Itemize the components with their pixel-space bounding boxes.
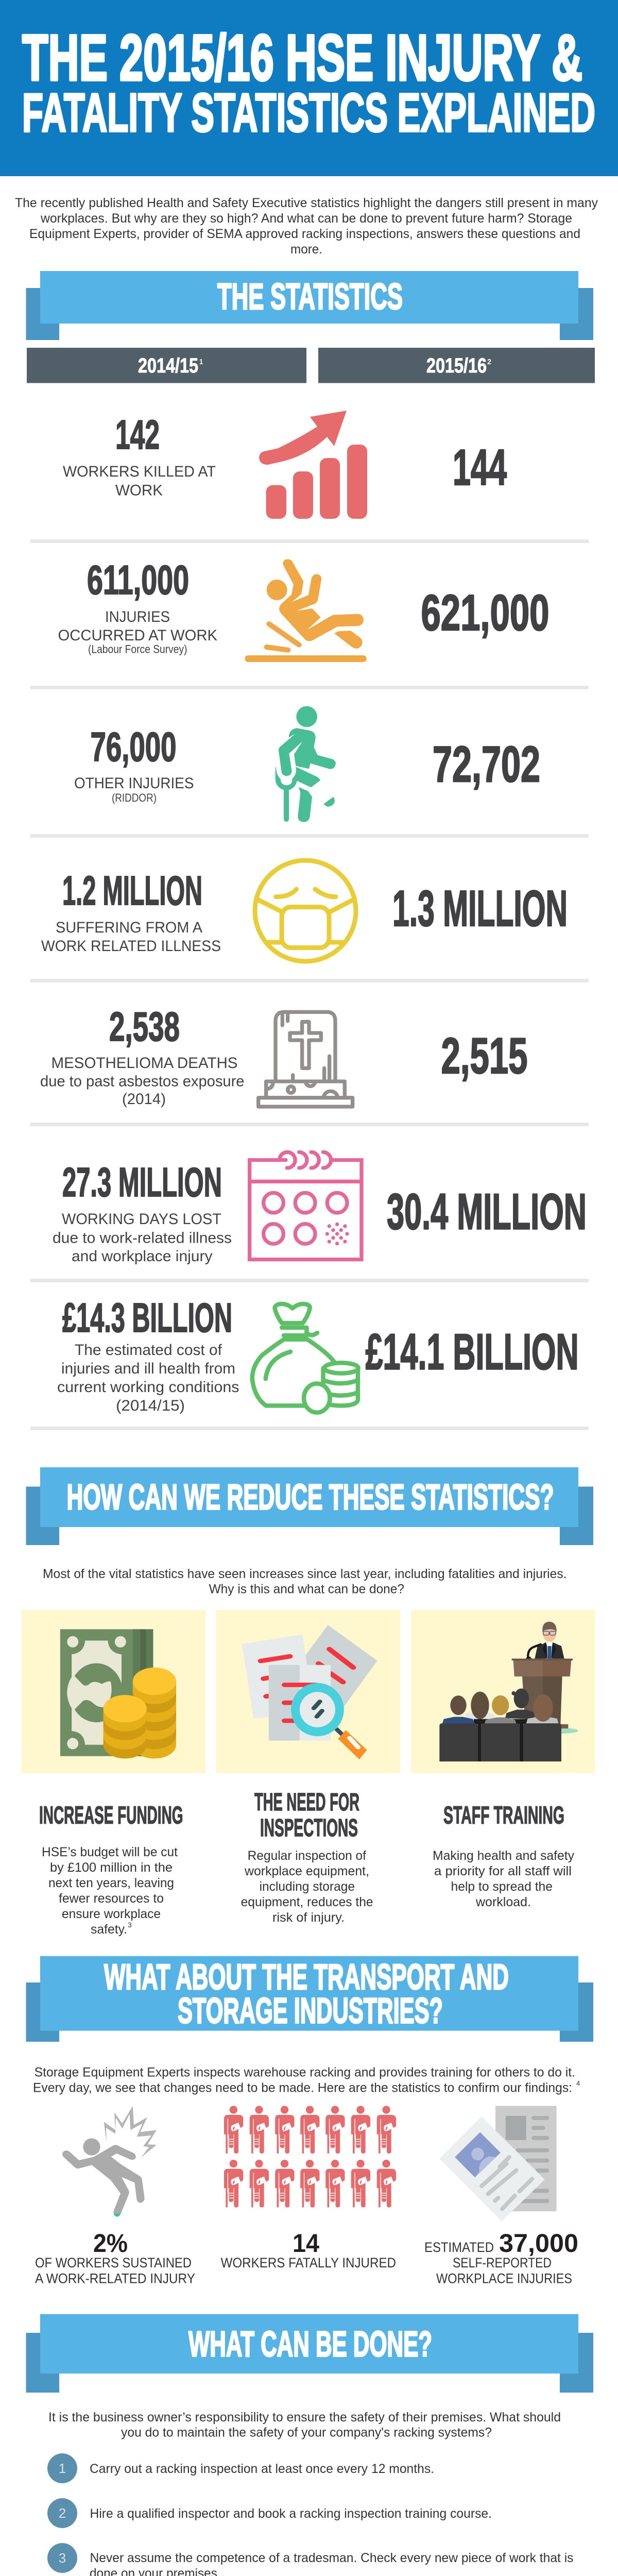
stat row: other injuries xyxy=(74,706,540,822)
step 3: 3 xyxy=(59,2550,66,2566)
label: injuries occurred at work: (Labour Force Survey) xyxy=(88,643,187,656)
icon: banknotes and coins xyxy=(60,1629,176,1758)
figure: estimated 37,000: ESTIMATED xyxy=(424,2240,494,2255)
text: making health and safety a priority: help to spread the xyxy=(451,1879,553,1894)
text: regular inspection: workplace equipment, xyxy=(244,1864,369,1878)
label: suffering from a work related illness: WORK RELATED ILLNESS xyxy=(41,938,221,955)
intro text: storage equipment experts: Every day, we see that changes need to be made. Here are the statistics to confirm our findings: xyxy=(33,2080,572,2095)
intro text: storage equipment experts xyxy=(33,2065,580,2095)
intro text: storage equipment experts: 4 xyxy=(576,2079,580,2087)
stat row: workers killed: 144 xyxy=(453,439,507,496)
stat row: other injuries: 76,000 xyxy=(91,724,176,770)
text: making health and safety a priority: workload. xyxy=(475,1895,531,1909)
heading: increase funding: INCREASE FUNDING xyxy=(39,1802,183,1829)
ribbon heading: transport and storage xyxy=(26,1956,593,2042)
year column header 2014/15 xyxy=(27,348,306,383)
year column header 2015/16 xyxy=(318,348,595,383)
stat: 14 workers fatally injured xyxy=(221,2106,396,2270)
stat row: estimated cost xyxy=(57,1295,579,1414)
year column header 2014/15: 2014/15 xyxy=(138,354,198,377)
text: making health and safety a priority: Making health and safety xyxy=(433,1849,574,1863)
text: HSE budget: HSE’s budget will be cut xyxy=(42,1845,178,1859)
label: suffering from a work related illness xyxy=(41,919,221,955)
stat row: mesothelioma deaths xyxy=(40,1004,527,1108)
intro text: business owner's responsibility: you do to maintain the safety of your company's racking systems? xyxy=(121,2425,492,2439)
icon: grid of 14 injured people xyxy=(224,2106,396,2208)
stat row: workers killed xyxy=(63,411,507,519)
icon: person slipping xyxy=(245,559,367,662)
label: working days lost: and workplace injury xyxy=(72,1248,212,1265)
label: other injuries: (RIDDOR) xyxy=(112,791,157,804)
label: working days lost xyxy=(53,1211,232,1265)
figure: estimated 37,000 xyxy=(424,2229,578,2258)
step 2: 2 xyxy=(59,2505,66,2521)
text: HSE budget: 3 xyxy=(128,1921,132,1929)
text: regular inspection xyxy=(241,1849,373,1925)
title xyxy=(22,22,595,143)
panel: the need for inspections xyxy=(216,1610,400,1925)
stat row: working days lost: 27.3 MILLION xyxy=(62,1159,222,1205)
stat row: other injuries: 72,702 xyxy=(433,736,540,792)
label: working days lost: due to work-related illness xyxy=(53,1229,232,1247)
text: regular inspection: risk of injury. xyxy=(272,1910,345,1925)
label: estimated cost of injuries xyxy=(57,1342,239,1414)
label: other injuries xyxy=(74,775,194,804)
intro text: workplaces. But why are they so high? And what can be done to prevent future harm? Storage xyxy=(40,211,572,226)
stat row: mesothelioma deaths: 2,538 xyxy=(109,1004,180,1049)
intro text: business owner's responsibility: It is the business owner’s responsibility to ensure the safety of their premises. What should xyxy=(48,2410,561,2425)
intro text xyxy=(15,196,598,257)
label: estimated cost of injuries: (2014/15) xyxy=(116,1397,185,1414)
label: workers killed at work: WORK xyxy=(115,482,163,499)
stat row: working days lost xyxy=(53,1152,587,1265)
header banner xyxy=(0,0,618,176)
icon: money bag with coins xyxy=(252,1304,358,1413)
label: mesothelioma deaths: (2014) xyxy=(122,1091,166,1108)
step 2 xyxy=(47,2498,492,2528)
text: making health and safety a priority: a priority for all staff will xyxy=(434,1864,572,1878)
icon: injured person with crutch xyxy=(276,706,336,822)
text: regular inspection: equipment, reduces the xyxy=(241,1895,373,1909)
icon: gravestone xyxy=(259,1012,353,1107)
intro text: The recently published Health and Safety Executive statistics highlight the dangers still present in many xyxy=(15,196,598,210)
icon: rising bar chart with arrow xyxy=(259,411,367,519)
stat row: work related illness xyxy=(41,860,568,961)
label: working days lost: WORKING DAYS LOST xyxy=(62,1211,221,1228)
label: of workers sustained xyxy=(35,2255,195,2286)
ribbon heading: what can be done xyxy=(26,2314,593,2393)
label: workers killed at work xyxy=(63,463,216,499)
stat row: injuries occurred at work xyxy=(58,557,549,662)
icon: documents and magnifier xyxy=(242,1625,377,1759)
intro text: business owner's responsibility xyxy=(48,2410,561,2439)
intro text: more. xyxy=(290,242,322,257)
stat row: injuries occurred at work: 621,000 xyxy=(421,584,549,641)
text: HSE budget: safety. xyxy=(91,1922,127,1937)
ribbon heading: the statistics xyxy=(26,271,593,340)
label: injuries occurred at work: OCCURRED AT WORK xyxy=(58,627,217,644)
text: HSE budget xyxy=(42,1845,178,1937)
stat: 2% work-related injury: 2% xyxy=(93,2229,128,2258)
step 3 xyxy=(47,2543,574,2576)
figure: estimated 37,000: 37,000 xyxy=(499,2229,578,2258)
year column header 2015/16: 2015/16 xyxy=(426,354,487,377)
heading: the need for inspections: INSPECTIONS xyxy=(260,1815,358,1842)
panel: staff training xyxy=(411,1610,595,1909)
ribbon heading: transport and storage: STORAGE INDUSTRIES? xyxy=(178,1991,443,2031)
stat row: injuries occurred at work: 611,000 xyxy=(87,557,189,603)
text: HSE budget: next ten years, leaving xyxy=(48,1876,174,1890)
year column header 2015/16: 2 xyxy=(487,358,491,366)
panel: increase funding xyxy=(22,1610,206,1937)
step 1 xyxy=(47,2453,434,2483)
stat row: workers killed: 142 xyxy=(115,412,160,457)
ribbon heading: what can be done: WHAT CAN BE DONE? xyxy=(188,2324,432,2364)
icon: calendar xyxy=(250,1152,362,1260)
step 1: 1 xyxy=(59,2461,66,2476)
stat row: estimated cost: £14.3 BILLION xyxy=(62,1295,232,1341)
label: injuries occurred at work xyxy=(58,608,217,656)
label: self-reported workplace injuries xyxy=(436,2255,572,2286)
heading: the need for inspections: THE NEED FOR xyxy=(254,1789,359,1816)
intro text: vital statistics: Most of the vital statistics have seen increases since last year, including fatalities and injuries. xyxy=(43,1567,566,1581)
icon: newspaper reports xyxy=(439,2106,557,2222)
text: regular inspection: including storage xyxy=(260,1879,355,1894)
label: mesothelioma deaths: due to past asbestos exposure xyxy=(40,1073,244,1090)
label: other injuries: OTHER INJURIES xyxy=(74,775,194,792)
label: mesothelioma deaths xyxy=(40,1055,244,1108)
label: estimated cost of injuries: injuries and ill health from xyxy=(61,1360,235,1377)
illustration: speaker at podium with audience xyxy=(439,1622,578,1761)
stat: 2% work-related injury xyxy=(35,2106,195,2286)
text: HSE budget: by £100 million in the xyxy=(50,1860,173,1875)
heading: the need for inspections xyxy=(254,1789,359,1842)
icon: face with surgical mask xyxy=(255,860,356,961)
intro text: storage equipment experts: Storage Equipment Experts inspects warehouse racking and provides training for others to do it. xyxy=(35,2065,575,2079)
stat row: mesothelioma deaths: 2,515 xyxy=(441,1027,527,1084)
label: self-reported workplace injuries: SELF-REPORTED xyxy=(453,2255,552,2270)
label: estimated cost of injuries: The estimated cost of xyxy=(75,1342,222,1359)
text: regular inspection: Regular inspection of xyxy=(248,1849,366,1863)
intro text: vital statistics xyxy=(43,1567,566,1597)
stat row: work related illness: 1.2 MILLION xyxy=(62,868,202,913)
label: self-reported workplace injuries: WORKPLACE INJURIES xyxy=(436,2270,572,2286)
icon: person struck xyxy=(62,2106,157,2217)
label: workers killed at work: WORKERS KILLED AT xyxy=(63,463,216,480)
year column header 2014/15: 1 xyxy=(199,358,203,366)
step 2: Hire a qualified inspector and book a racking inspection training course. xyxy=(90,2506,492,2521)
step 1: Carry out a racking inspection at least once every 12 months. xyxy=(90,2462,434,2476)
text: HSE budget: fewer resources to xyxy=(59,1891,164,1906)
text: HSE budget: ensure workplace xyxy=(62,1907,161,1921)
label: of workers sustained: A WORK-RELATED INJURY xyxy=(35,2270,195,2286)
stat: 14 workers fatally injured: 14 xyxy=(293,2229,319,2258)
label: workers fatally injured: WORKERS FATALLY INJURED xyxy=(221,2255,396,2270)
label: mesothelioma deaths: MESOTHELIOMA DEATHS xyxy=(52,1055,238,1072)
label: suffering from a work related illness: SUFFERING FROM A xyxy=(56,919,202,936)
ribbon heading: the statistics: THE STATISTICS xyxy=(217,277,403,317)
stat: 37,000 self-reported injuries xyxy=(424,2106,578,2286)
label: injuries occurred at work: INJURIES xyxy=(105,608,170,625)
label: estimated cost of injuries: current working conditions xyxy=(57,1379,239,1396)
ribbon heading: how can we reduce xyxy=(26,1467,593,1545)
label: of workers sustained: OF WORKERS SUSTAINED xyxy=(35,2255,192,2270)
intro text: Equipment Experts, provider of SEMA approved racking inspections, answers these questions and xyxy=(29,227,580,241)
step 3: Never assume the competence of a tradesman. Check every new piece of work that is xyxy=(90,2551,574,2565)
text: making health and safety a priority xyxy=(433,1849,574,1909)
intro text: vital statistics: Why is this and what can be done? xyxy=(209,1582,404,1597)
